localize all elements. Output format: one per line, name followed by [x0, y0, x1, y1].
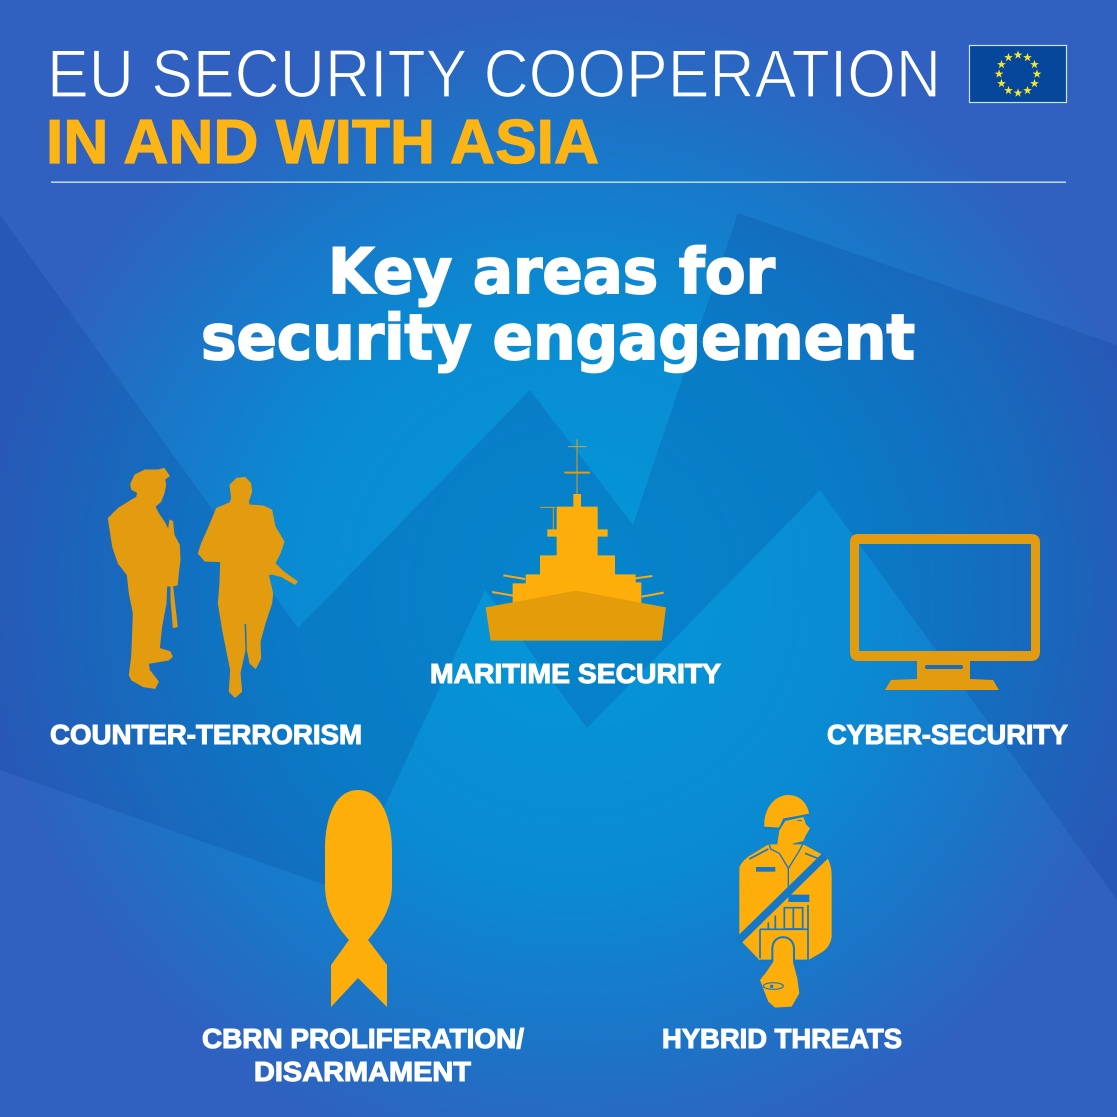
- icon: soldiers: [108, 468, 297, 697]
- label: CBRN: DISARMAMENT: [254, 1056, 471, 1087]
- icon: hybrid soldier: [737, 795, 832, 1008]
- title: IN AND WITH ASIA: [46, 108, 599, 177]
- title: EU SECURITY COOPERATION: [47, 36, 941, 112]
- heading: Key areas for: [328, 235, 775, 308]
- label: CBRN: CBRN PROLIFERATION/: [202, 1023, 524, 1054]
- icon: bomb: [325, 790, 392, 1007]
- icon: EU flag: [970, 46, 1066, 102]
- label: counter-terrorism: COUNTER-TERRORISM: [50, 719, 362, 750]
- heading: [201, 235, 915, 374]
- divider line: [51, 182, 1066, 183]
- label: CBRN: [202, 1023, 524, 1087]
- icon: monitor: [850, 534, 1040, 690]
- icon: warship: [486, 439, 666, 641]
- label: cyber-security: CYBER-SECURITY: [827, 719, 1068, 750]
- title: [46, 36, 941, 177]
- label: maritime security: MARITIME SECURITY: [430, 658, 721, 689]
- heading: security engagement: [201, 301, 915, 374]
- label: hybrid threats: HYBRID THREATS: [662, 1023, 902, 1054]
